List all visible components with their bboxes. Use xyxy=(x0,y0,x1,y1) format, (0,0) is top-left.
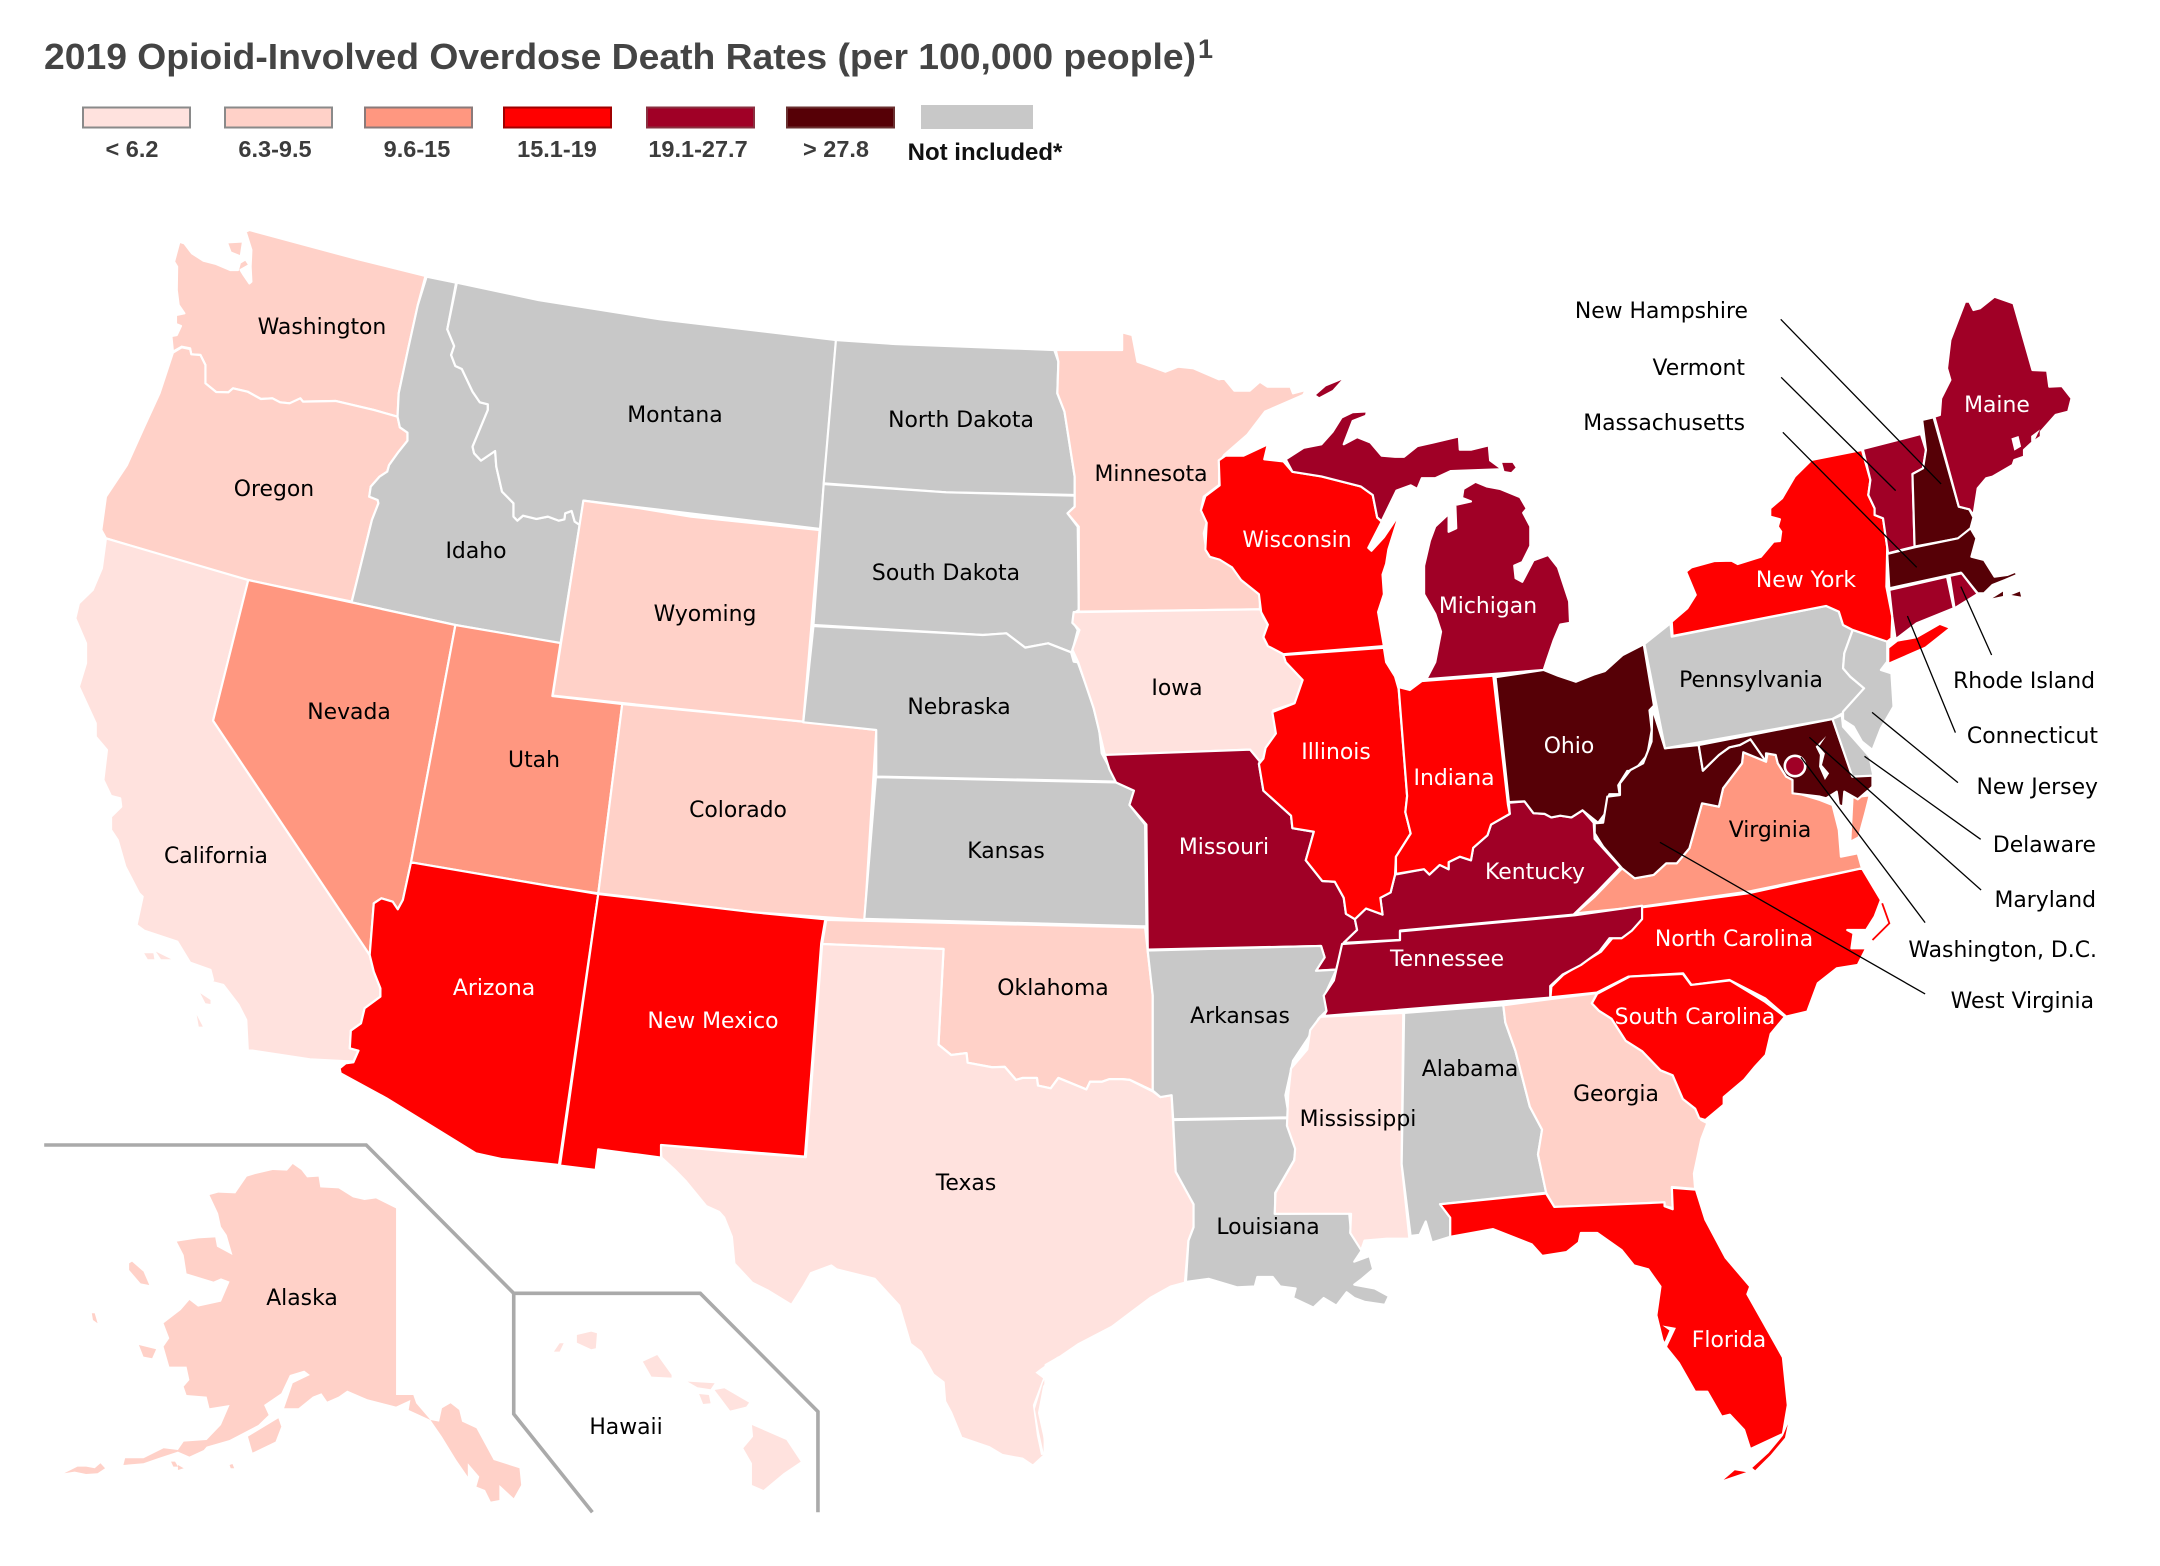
state: Florida xyxy=(1440,1188,1788,1480)
label: Indiana: Indiana xyxy=(1413,766,1495,791)
leader: Washington, D.C. xyxy=(1801,757,1925,923)
label: Mississippi: Mississippi xyxy=(1300,1107,1416,1132)
state: Michigan xyxy=(1286,380,1570,679)
state: Kansas xyxy=(864,777,1146,926)
state: Delaware xyxy=(1833,715,1873,777)
label: Alabama: Alabama xyxy=(1422,1057,1518,1082)
legend item: not included: Not included* xyxy=(908,139,1063,166)
label: Arizona: Arizona xyxy=(453,976,535,1001)
state: North Carolina xyxy=(1551,868,1889,1017)
label: Oregon: Oregon xyxy=(234,477,314,502)
state: Pennsylvania xyxy=(1644,606,1864,748)
region: southeast states xyxy=(1275,906,1788,1480)
label: California: California xyxy=(164,844,268,869)
label: Washington: Washington xyxy=(258,315,386,340)
state: Arkansas xyxy=(1148,946,1336,1119)
legend item: over 27.8 xyxy=(787,108,894,162)
label: New York: New York xyxy=(1756,568,1856,593)
state: New Hampshire xyxy=(1912,417,1974,547)
leader: Connecticut xyxy=(1907,616,1955,733)
legend item: 9.6-15: 9.6-15 xyxy=(384,136,450,162)
state: Wisconsin xyxy=(1201,444,1400,654)
inset frames for Alaska and Hawaii xyxy=(44,1145,818,1512)
label: Maryland: Maryland xyxy=(1994,888,2096,913)
region: southwest states xyxy=(75,538,876,1165)
label: Maine: Maine xyxy=(1964,393,2030,418)
state: Wyoming xyxy=(553,501,820,722)
label: Delaware: Delaware xyxy=(1993,833,2096,858)
label: Oklahoma: Oklahoma xyxy=(997,976,1109,1001)
state: Ohio xyxy=(1496,644,1654,823)
state: New York xyxy=(1672,450,1948,662)
label: West Virginia: West Virginia xyxy=(1951,989,2094,1014)
state: Hawaii xyxy=(554,1332,801,1490)
region: central plains states xyxy=(553,332,1306,782)
region: northeast states xyxy=(1644,297,2072,777)
label: North Dakota: North Dakota xyxy=(888,408,1034,433)
state: Washington xyxy=(171,230,425,417)
label: Vermont: Vermont xyxy=(1652,356,1745,381)
legend item: under 6.2 xyxy=(83,108,190,162)
state: Mississippi xyxy=(1275,1013,1409,1250)
label: Iowa: Iowa xyxy=(1151,676,1203,701)
state: Massachusetts xyxy=(1887,528,2021,598)
leader: Rhode Island xyxy=(1961,587,1992,655)
label: Minnesota: Minnesota xyxy=(1095,462,1207,487)
state: Connecticut xyxy=(1889,577,1954,639)
state: Idaho xyxy=(352,277,580,643)
state: Oklahoma xyxy=(822,920,1153,1091)
label: Wisconsin: Wisconsin xyxy=(1242,528,1352,553)
state: Virginia xyxy=(1576,752,1868,913)
state labels xyxy=(164,299,2098,1440)
state: Alabama xyxy=(1402,1005,1546,1243)
label: Pennsylvania: Pennsylvania xyxy=(1679,668,1823,693)
label: Louisiana: Louisiana xyxy=(1216,1215,1320,1240)
state: South Dakota xyxy=(813,484,1079,652)
label: South Carolina: South Carolina xyxy=(1615,1005,1775,1030)
state: Minnesota xyxy=(1056,332,1306,612)
title: 1 xyxy=(1198,34,1213,64)
label: Massachusetts: Massachusetts xyxy=(1583,411,1745,436)
state: Alaska xyxy=(64,1164,521,1502)
title: 2019 Opioid-Involved Overdose Death Rates (per 100,000 people) xyxy=(44,36,1196,77)
label: Georgia: Georgia xyxy=(1573,1082,1659,1107)
legend item: 9.6-15 xyxy=(365,108,472,162)
region: northwest states xyxy=(101,230,836,643)
label: South Dakota: South Dakota xyxy=(872,561,1020,586)
legend item: not included xyxy=(908,105,1063,166)
leader: New Jersey xyxy=(1872,712,1958,783)
label: Nevada: Nevada xyxy=(307,700,391,725)
legend item: over 27.8: > 27.8 xyxy=(803,136,869,162)
leader lines for northeastern labels xyxy=(1781,319,1992,733)
label: Connecticut: Connecticut xyxy=(1967,724,2098,749)
label: Kentucky: Kentucky xyxy=(1485,860,1585,885)
legend item: 19.1-27.7: 19.1-27.7 xyxy=(648,136,748,162)
state: Illinois xyxy=(1259,648,1411,919)
legend item: 6.3-9.5: 6.3-9.5 xyxy=(238,136,312,162)
state: Maine xyxy=(1934,297,2072,515)
label: Hawaii: Hawaii xyxy=(589,1415,663,1440)
label: North Carolina: North Carolina xyxy=(1655,927,1813,952)
leader: New Hampshire xyxy=(1781,319,1941,484)
state: Oregon xyxy=(101,347,407,602)
label: New Mexico: New Mexico xyxy=(647,1009,779,1034)
label: Wyoming: Wyoming xyxy=(654,602,756,627)
state: Tennessee xyxy=(1324,906,1642,1016)
label: Alaska: Alaska xyxy=(266,1286,338,1311)
state: Montana xyxy=(447,283,836,529)
label: Nebraska: Nebraska xyxy=(907,695,1011,720)
state: Georgia xyxy=(1503,993,1707,1208)
label: New Jersey: New Jersey xyxy=(1977,775,2098,800)
legend item: under 6.2: < 6.2 xyxy=(106,136,158,162)
label: Rhode Island: Rhode Island xyxy=(1953,669,2095,694)
label: Washington, D.C.: Washington, D.C. xyxy=(1908,938,2097,963)
leader: Vermont xyxy=(1781,377,1896,491)
label: New Hampshire: New Hampshire xyxy=(1575,299,1748,324)
legend item: 6.3-9.5 xyxy=(225,108,332,162)
state: Nevada xyxy=(213,580,455,955)
state: West Virginia xyxy=(1595,708,1767,878)
state: Indiana xyxy=(1396,676,1510,875)
state: New Jersey xyxy=(1843,630,1894,750)
label: Arkansas: Arkansas xyxy=(1190,1004,1290,1029)
marker: Washington, D.C. xyxy=(1785,756,1805,776)
label: Idaho: Idaho xyxy=(445,539,507,564)
legend item: 19.1-27.7 xyxy=(647,108,754,162)
label: Illinois: Illinois xyxy=(1301,740,1371,765)
state: Nebraska xyxy=(803,626,1117,782)
state: Kentucky xyxy=(1344,801,1620,943)
state: Texas xyxy=(660,944,1194,1466)
state: Colorado xyxy=(598,704,876,920)
state: Louisiana xyxy=(1173,1118,1389,1308)
label: Michigan: Michigan xyxy=(1439,594,1537,619)
state: Maryland xyxy=(1699,719,1872,807)
state: North Dakota xyxy=(824,340,1075,495)
leader: West Virginia xyxy=(1660,842,1925,994)
leader lines for mid-Atlantic labels xyxy=(1660,712,1981,994)
legend item: 15.1-19 xyxy=(504,108,611,162)
state: South Carolina xyxy=(1592,974,1785,1120)
label: Utah: Utah xyxy=(508,748,560,773)
state: Missouri xyxy=(1105,750,1357,971)
leader: Delaware xyxy=(1864,756,1981,839)
label: Texas: Texas xyxy=(935,1171,996,1196)
label: Kansas: Kansas xyxy=(967,839,1045,864)
state: Utah xyxy=(411,625,622,893)
legend xyxy=(83,105,1063,166)
state: Iowa xyxy=(1072,609,1303,761)
leader: Maryland xyxy=(1809,737,1981,890)
state: New Mexico xyxy=(560,894,825,1170)
region: Great Lakes and Midwest states xyxy=(864,380,1654,971)
region: Alaska and Hawaii xyxy=(64,1164,801,1502)
label: Colorado: Colorado xyxy=(689,798,787,823)
region: mid-Atlantic states xyxy=(1551,708,1889,1017)
label: Virginia: Virginia xyxy=(1729,818,1811,843)
state: California xyxy=(75,538,380,1062)
legend item: 15.1-19: 15.1-19 xyxy=(517,136,597,162)
leader: Massachusetts xyxy=(1783,432,1917,567)
region: south central states xyxy=(660,920,1389,1466)
state: Vermont xyxy=(1863,434,1926,553)
label: Missouri: Missouri xyxy=(1179,835,1269,860)
label: Ohio: Ohio xyxy=(1544,734,1594,759)
label: Montana: Montana xyxy=(627,403,723,428)
state: Arizona xyxy=(340,862,598,1165)
state: Rhode Island xyxy=(1950,573,1978,608)
label: Tennessee: Tennessee xyxy=(1389,947,1504,972)
label: Florida: Florida xyxy=(1692,1328,1766,1353)
